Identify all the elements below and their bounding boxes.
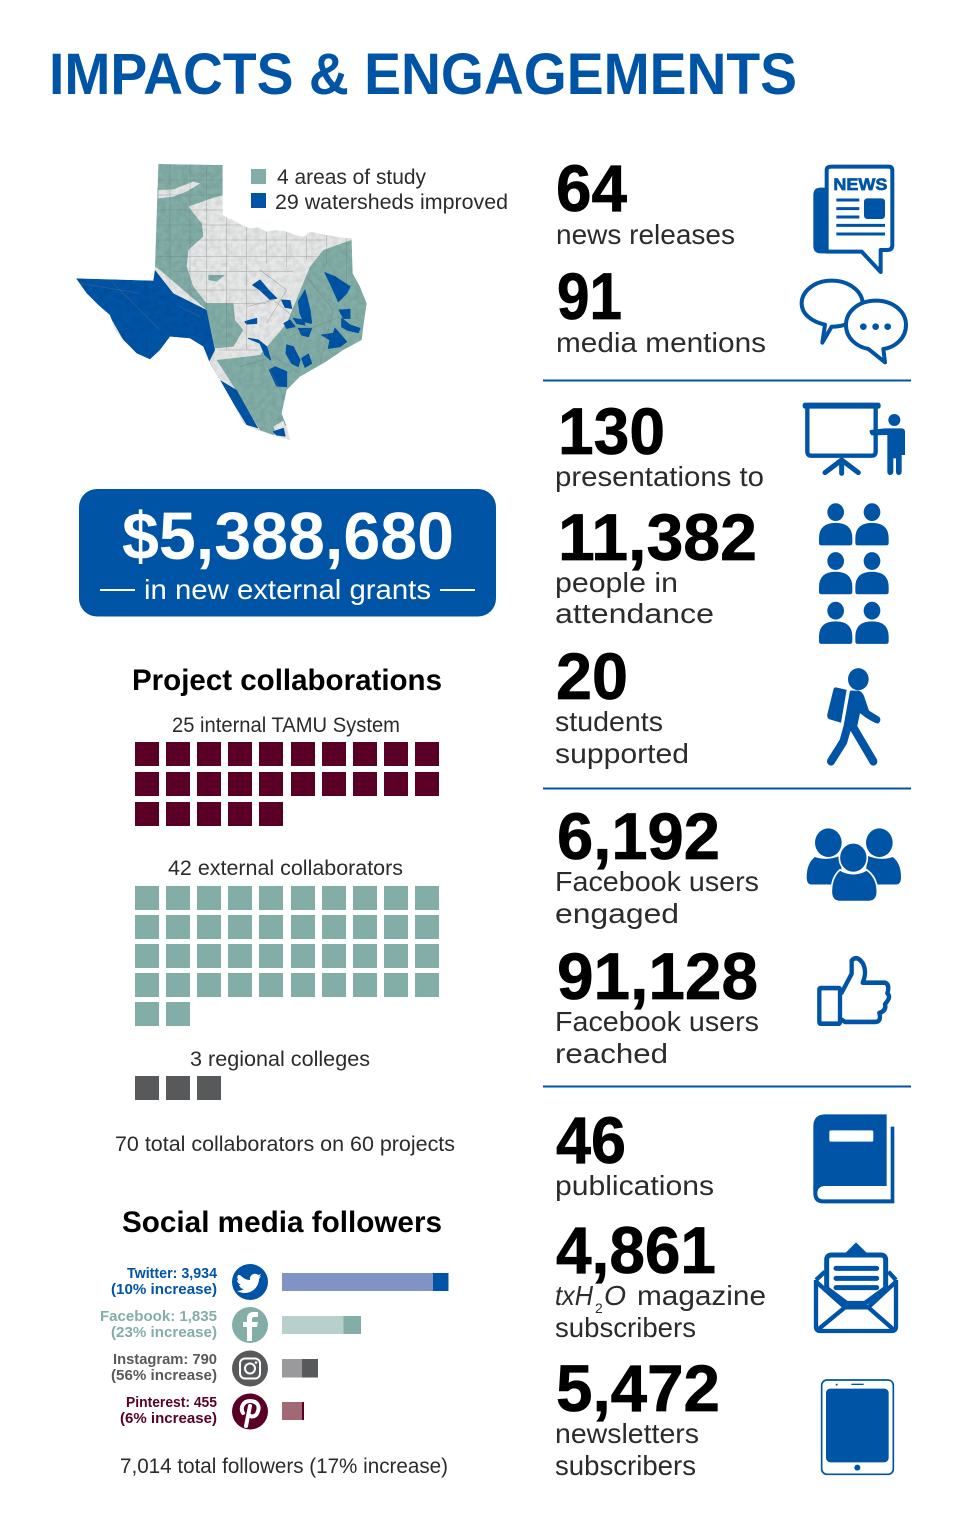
legend: areas of study: 4 areas of study [277, 166, 426, 189]
social row: Instagram [111, 1350, 318, 1386]
stat: Facebook reached: 91,128 [557, 939, 758, 1013]
stat: newsletter subscribers: subscribers [555, 1450, 696, 1481]
stat: Facebook engaged: 6,192 [557, 799, 720, 873]
stat: presentations: 130 [558, 394, 665, 468]
stat: magazine subscribers: magazine [637, 1280, 766, 1311]
icon: newspaper: NEWS [833, 175, 887, 194]
waffle chart: internal TAMU [135, 714, 439, 826]
stat: magazine subscribers: 2 [595, 1300, 603, 1316]
stat: attendance [555, 500, 757, 629]
grants callout: in new external grants [144, 574, 431, 605]
grants callout: $5,388,680 [122, 499, 454, 574]
icon: book [813, 1114, 894, 1203]
stat: news releases: news releases [556, 219, 735, 250]
social row: Twitter: Twitter: 3,934 [127, 1266, 217, 1282]
social row: Facebook [100, 1307, 361, 1343]
stat: magazine subscribers: O [604, 1280, 626, 1311]
stat: media mentions: 91 [557, 259, 622, 333]
stat: newsletter subscribers: newsletters [555, 1418, 699, 1449]
stat: Facebook engaged: Facebook users [555, 866, 759, 897]
stat: Facebook reached [555, 939, 759, 1069]
stat: Facebook engaged: engaged [555, 898, 679, 929]
stat: publications: 46 [556, 1103, 626, 1177]
waffle chart: external collaborators: 42 external collaborators [168, 857, 403, 880]
stat: magazine subscribers [555, 1213, 766, 1343]
social row: Pinterest [120, 1394, 304, 1430]
social row: Instagram: Instagram: 790 [113, 1352, 217, 1368]
Texas map [76, 164, 366, 440]
stat: students [555, 639, 689, 769]
project collaborations heading: Project collaborations [132, 664, 442, 697]
stat: students: 20 [556, 639, 628, 713]
icon: audience [819, 503, 889, 644]
stat: newsletter subscribers [555, 1351, 720, 1481]
stat: news releases [556, 151, 735, 250]
social row: Twitter: (10% increase) [111, 1282, 217, 1298]
social media heading: Social media followers [122, 1206, 442, 1239]
stat: magazine subscribers: txH [555, 1280, 594, 1311]
social row: Pinterest: (6% increase) [120, 1411, 217, 1427]
stat: media mentions [556, 259, 766, 358]
stat: attendance: people in [555, 567, 678, 598]
social row: Instagram: (56% increase) [111, 1368, 217, 1384]
followers total: 7,014 total followers (17% increase) [120, 1455, 448, 1478]
title: IMPACTS & ENGAGEMENTS [49, 42, 797, 107]
stat: Facebook reached: Facebook users [555, 1006, 759, 1037]
waffle chart: regional colleges: 3 regional colleges [190, 1048, 370, 1071]
stat: presentations [555, 394, 764, 492]
icon: newspaper [813, 167, 892, 272]
icon: presenter [803, 403, 905, 475]
icon: user group [807, 828, 901, 902]
icon: thumbs up [819, 958, 889, 1024]
stat: Facebook engaged [555, 799, 759, 929]
stat: magazine subscribers: subscribers [555, 1312, 696, 1343]
icon: tablet [822, 1380, 893, 1474]
social row: Twitter [111, 1264, 448, 1300]
stat: Facebook reached: reached [555, 1038, 668, 1069]
social row: Facebook: (23% increase) [111, 1325, 217, 1341]
collaborators total: 70 total collaborators on 60 projects [115, 1133, 455, 1156]
grants callout [79, 489, 496, 616]
stat: presentations: presentations to [555, 461, 764, 492]
legend: watersheds improved: 29 watersheds improved [275, 191, 508, 214]
stat: newsletter subscribers: 5,472 [556, 1351, 720, 1425]
stat: attendance: 11,382 [558, 500, 757, 574]
waffle chart: regional colleges [135, 1048, 370, 1100]
stat: news releases: 64 [556, 151, 627, 225]
icon: open envelope [816, 1242, 896, 1331]
stat: students: supported [555, 738, 689, 769]
social row: Pinterest: Pinterest: 455 [126, 1395, 217, 1411]
social row: Facebook: Facebook: 1,835 [100, 1309, 217, 1325]
stat: magazine subscribers: 4,861 [556, 1213, 716, 1287]
icon: speech bubbles [802, 281, 906, 362]
stat: media mentions: media mentions [556, 327, 766, 358]
icon: walking student [827, 668, 880, 761]
waffle chart: external collaborators [135, 857, 439, 1026]
stat: attendance: attendance [555, 598, 714, 629]
stat: publications [555, 1103, 714, 1201]
map of Texas with legend [76, 164, 507, 440]
stat: students: students [555, 706, 663, 737]
waffle chart: internal TAMU: 25 internal TAMU System [172, 714, 400, 737]
stat: publications: publications [555, 1170, 714, 1201]
